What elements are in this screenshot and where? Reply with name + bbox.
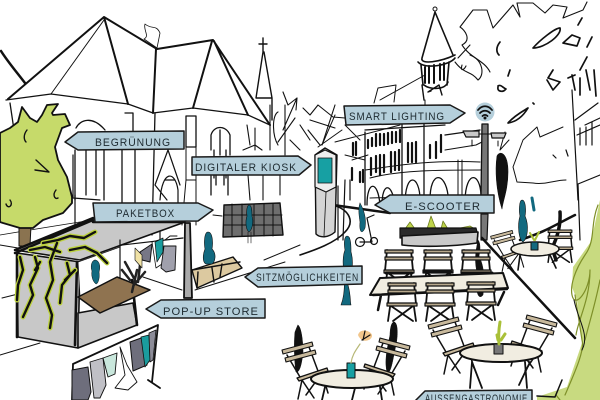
- buildings right: [318, 7, 482, 240]
- icon: wifi signal: [476, 102, 494, 122]
- vase and plant: [531, 242, 538, 250]
- tree: right dark trunk: [496, 153, 508, 209]
- right foreground foliage: [537, 200, 600, 400]
- stall faces: [17, 253, 80, 348]
- church walls and windows: [10, 103, 196, 240]
- back chairs: [384, 250, 414, 288]
- church roof: [8, 17, 270, 125]
- vase with flower: [347, 363, 355, 378]
- stall roof: [15, 218, 185, 260]
- front chairs: [387, 283, 417, 321]
- people on the square: [294, 198, 560, 372]
- label: Paketbox: [93, 203, 213, 222]
- clothes rack: [72, 325, 160, 400]
- digital kiosk: [315, 148, 337, 237]
- parcel box: [223, 203, 283, 243]
- person standing: [341, 236, 352, 305]
- person at parcel box: [246, 205, 253, 243]
- left tree: [0, 104, 72, 246]
- stall pillar: [184, 223, 192, 298]
- lamp post with wifi: [463, 102, 506, 240]
- table top: [370, 273, 508, 295]
- trunk: [19, 225, 31, 246]
- person at table: [519, 200, 527, 242]
- foliage: [0, 104, 72, 228]
- label: E-Scooter: E-SCOOTER: [405, 201, 481, 213]
- cafe table right: [491, 230, 573, 271]
- branch: top left: [1, 51, 25, 83]
- dark figure left: [294, 325, 303, 372]
- pop-up store: [15, 218, 192, 348]
- church steeple: [256, 38, 272, 120]
- tower: [418, 12, 455, 88]
- lamp heads: [463, 131, 506, 138]
- hanging plant: [17, 232, 107, 328]
- hanging clothes: [135, 236, 177, 272]
- label: Digitaler Kiosk: [192, 156, 311, 175]
- label: Digitaler Kiosk: DIGITALER KIOSK: [195, 162, 297, 174]
- bench and person: [192, 232, 242, 288]
- vase and plant: [494, 344, 503, 354]
- label: Sitzmöglichkeiten: [245, 266, 362, 287]
- label: Pop-up Store: [146, 299, 265, 318]
- cafe table middle: [428, 315, 557, 388]
- e-scooter: [356, 215, 378, 246]
- kiosk screen: [318, 158, 332, 183]
- counter: [78, 277, 150, 313]
- label: Sitzmöglichkeiten: SITZMÖGLICHKEITEN: [256, 272, 359, 284]
- person by scooter: [359, 203, 366, 232]
- label: Paketbox: PAKETBOX: [116, 208, 175, 220]
- label: Begrünung: [65, 131, 184, 150]
- label: Pop-up Store: POP-UP STORE: [163, 306, 259, 318]
- background tree: upper right: [460, 2, 600, 240]
- dark figure behind table: [475, 240, 484, 297]
- person in stall: [91, 260, 100, 284]
- cafe table left: [282, 330, 410, 400]
- lamp pole: [481, 124, 488, 196]
- label: Smart Lighting: [344, 105, 465, 125]
- counter plant: [122, 262, 145, 292]
- dark figure right of vase: [386, 322, 397, 372]
- long table with chairs: [370, 250, 508, 321]
- planter: [400, 216, 478, 246]
- housefront: [335, 75, 425, 142]
- label: Begrünung: BEGRÜNUNG: [95, 137, 171, 149]
- label: Smart Lighting: SMART LIGHTING: [349, 111, 445, 123]
- church: [0, 17, 285, 240]
- ground lines: [0, 205, 575, 355]
- tree: centre foliage sketch: [278, 92, 345, 150]
- label: E-Scooter: [375, 195, 494, 213]
- label: Außengastronomie: [415, 390, 532, 400]
